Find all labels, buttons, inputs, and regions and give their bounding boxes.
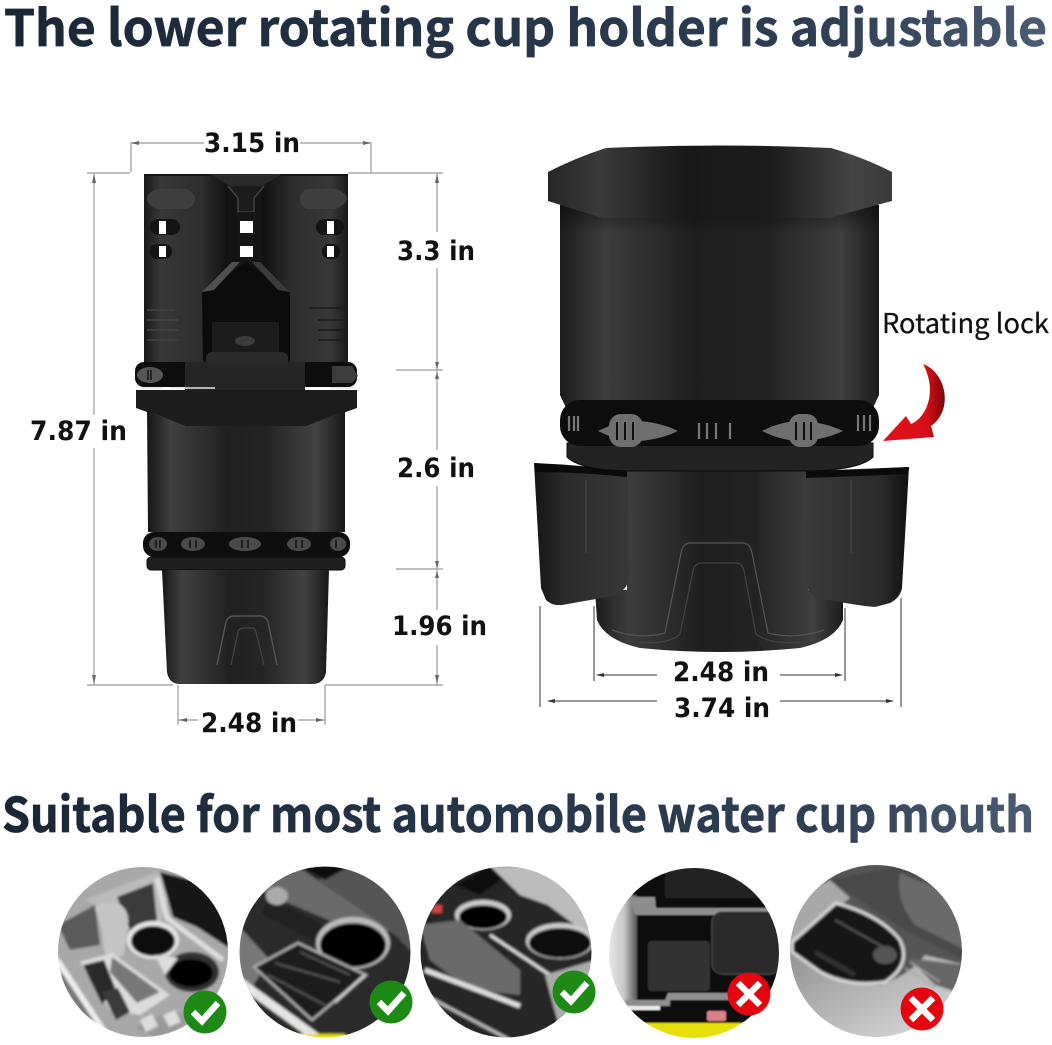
icon: green check 1	[184, 990, 226, 1034]
icon: red cross 5	[900, 988, 944, 1030]
base arch detail	[612, 543, 824, 643]
label: total height 7.87 in: 7.87 in	[30, 416, 127, 447]
product: extended cup holder front view	[135, 174, 358, 684]
flange	[136, 390, 357, 426]
icon: green check 3	[552, 970, 596, 1014]
icon: red cross 4	[728, 972, 770, 1016]
photo 3: console with two cup holders	[418, 864, 595, 1040]
left product diagram with dimensions	[30, 128, 487, 739]
photo row: car cup holders	[55, 863, 966, 1043]
label: upper height 3.3 in: 3.3 in	[397, 236, 475, 267]
photo 2: dark console with cup holder	[238, 865, 415, 1042]
photo 5: silver trim cup recess	[788, 863, 966, 1040]
left pocket	[534, 463, 629, 605]
centre latch	[202, 262, 290, 366]
label: rotating lock: Rotating lock	[882, 302, 1049, 341]
upper arms	[144, 174, 348, 364]
product: cup holder with side pockets	[534, 146, 909, 652]
arrowheads	[92, 141, 439, 722]
dimension lines: left product	[87, 143, 443, 725]
dial tabs	[598, 414, 843, 447]
right pocket	[805, 467, 909, 607]
side and centre window slots	[159, 221, 334, 257]
lower cup	[162, 570, 329, 684]
lower dial ring	[143, 532, 350, 570]
icon: red curved arrow	[883, 364, 945, 441]
disc under dial	[567, 443, 873, 471]
lower body and base	[595, 469, 843, 652]
label: outer width 3.74 in: 3.74 in	[674, 693, 770, 724]
icon: green check 2	[370, 980, 412, 1024]
rotating dial ring	[560, 400, 879, 447]
dial tick marks	[617, 422, 811, 440]
dimension lines: right product	[540, 598, 901, 707]
pocket top rims	[534, 463, 909, 478]
label: middle height 2.6 in: 2.6 in	[397, 453, 475, 484]
arrowheads	[547, 673, 894, 703]
pocket seams	[586, 480, 851, 553]
label: lower height 1.96 in: 1.96 in	[392, 611, 487, 642]
right product diagram with dimensions	[534, 146, 1049, 724]
upper dial ring	[135, 362, 358, 390]
main body	[147, 410, 345, 532]
label: width 3.15 in: 3.15 in	[204, 128, 300, 159]
photo 4: black console tray	[605, 865, 785, 1043]
cup body	[560, 205, 879, 410]
lid	[548, 146, 892, 218]
photo 1: light console with shifter	[55, 865, 232, 1042]
shadow under lid	[560, 205, 879, 395]
label: base width 2.48 in: 2.48 in	[201, 708, 297, 739]
label: inner width 2.48 in: 2.48 in	[673, 657, 769, 688]
